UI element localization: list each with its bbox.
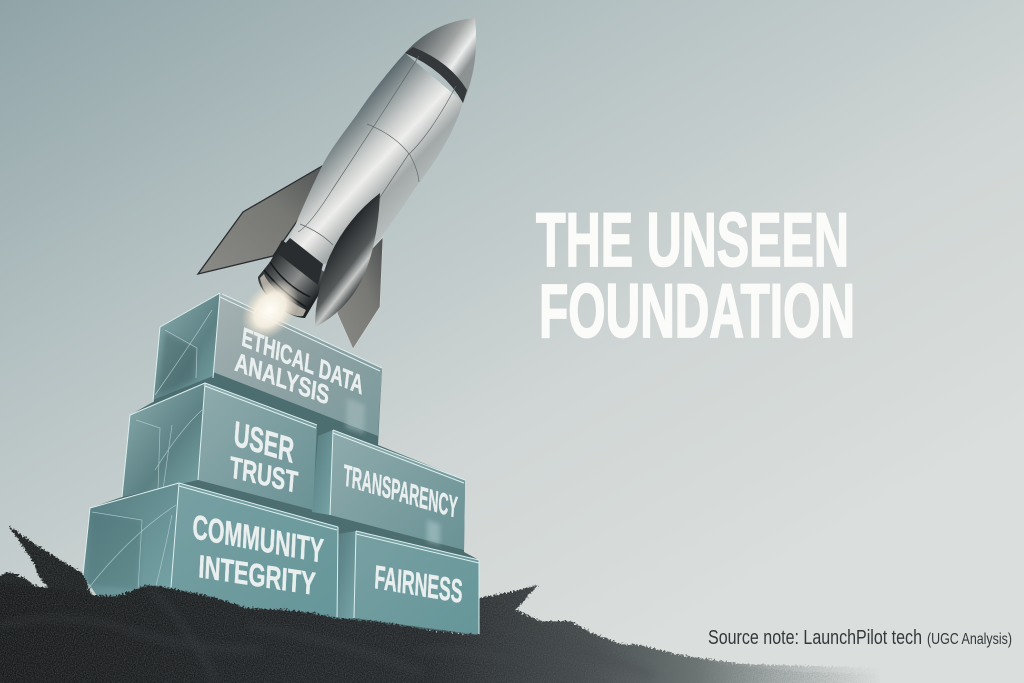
icon: nose band xyxy=(405,47,467,103)
ice block: community integrity xyxy=(83,483,338,622)
source note xyxy=(708,627,1012,649)
label: ethical data: ETHICAL DATA xyxy=(240,321,365,400)
icon: back fin xyxy=(337,237,383,349)
icon: dark collar xyxy=(277,238,323,285)
ice block: fairness xyxy=(336,531,479,635)
label: community: COMMUNITY xyxy=(192,508,325,571)
block stack base xyxy=(83,293,479,635)
icon: rocket nose cone xyxy=(405,18,476,103)
icon: rocket body xyxy=(290,53,463,264)
right dust plume xyxy=(470,585,880,683)
title line 1: THE UNSEEN xyxy=(536,198,849,283)
label: trust: TRUST xyxy=(228,450,299,500)
rocket exhaust flame xyxy=(230,269,310,351)
ice block: transparency xyxy=(312,430,465,550)
label: integrity: INTEGRITY xyxy=(198,548,316,602)
icon: front fin xyxy=(315,193,380,327)
dust plumes and back ground xyxy=(0,525,880,683)
rocket xyxy=(198,18,476,349)
label: analysis: ANALYSIS xyxy=(233,347,331,411)
icon: rocket engine nozzle xyxy=(258,240,335,318)
source text: Source note: LaunchPilot tech xyxy=(708,627,922,649)
ice block: ethical data analysis xyxy=(153,293,382,436)
icon: panel lines xyxy=(298,56,456,245)
infographic canvas: TRANSPARENCY xyxy=(343,459,459,525)
ice block: user trust xyxy=(122,383,317,510)
label: user: USER xyxy=(232,414,296,471)
foreground dark sand xyxy=(0,582,880,683)
label: fairness: FAIRNESS xyxy=(374,559,463,611)
icon: left fin xyxy=(198,162,329,274)
block labels xyxy=(192,321,463,611)
title xyxy=(536,198,855,354)
left dust plume xyxy=(0,525,100,640)
